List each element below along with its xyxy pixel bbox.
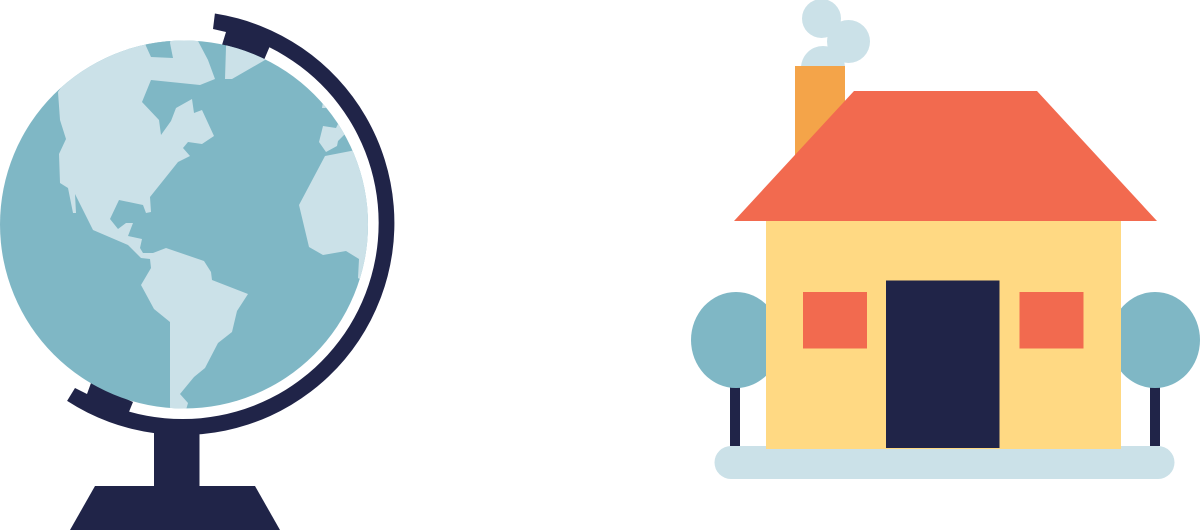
Scandinavia sliver [322, 104, 326, 108]
house wall [766, 220, 1121, 449]
globe stand base [70, 486, 280, 530]
ground [714, 446, 1174, 479]
globe stand stem [154, 430, 200, 490]
continents [58, 30, 380, 410]
right tree [1110, 292, 1200, 446]
icon: globe [0, 14, 394, 530]
globe meridian arc with clamps [67, 14, 394, 435]
chimney [795, 66, 845, 166]
Iberia and Europe [319, 124, 344, 152]
Greenland [225, 45, 265, 79]
left window [803, 292, 867, 348]
left tree [691, 292, 781, 446]
Arctic sea inlet [146, 41, 173, 58]
icon: house [691, 0, 1200, 479]
right window [1020, 292, 1084, 348]
Africa [299, 150, 368, 279]
smoke puffs [801, 0, 870, 66]
door [886, 280, 1000, 448]
North and Central America [58, 30, 248, 410]
roof [734, 91, 1157, 221]
globe sphere [0, 40, 368, 408]
